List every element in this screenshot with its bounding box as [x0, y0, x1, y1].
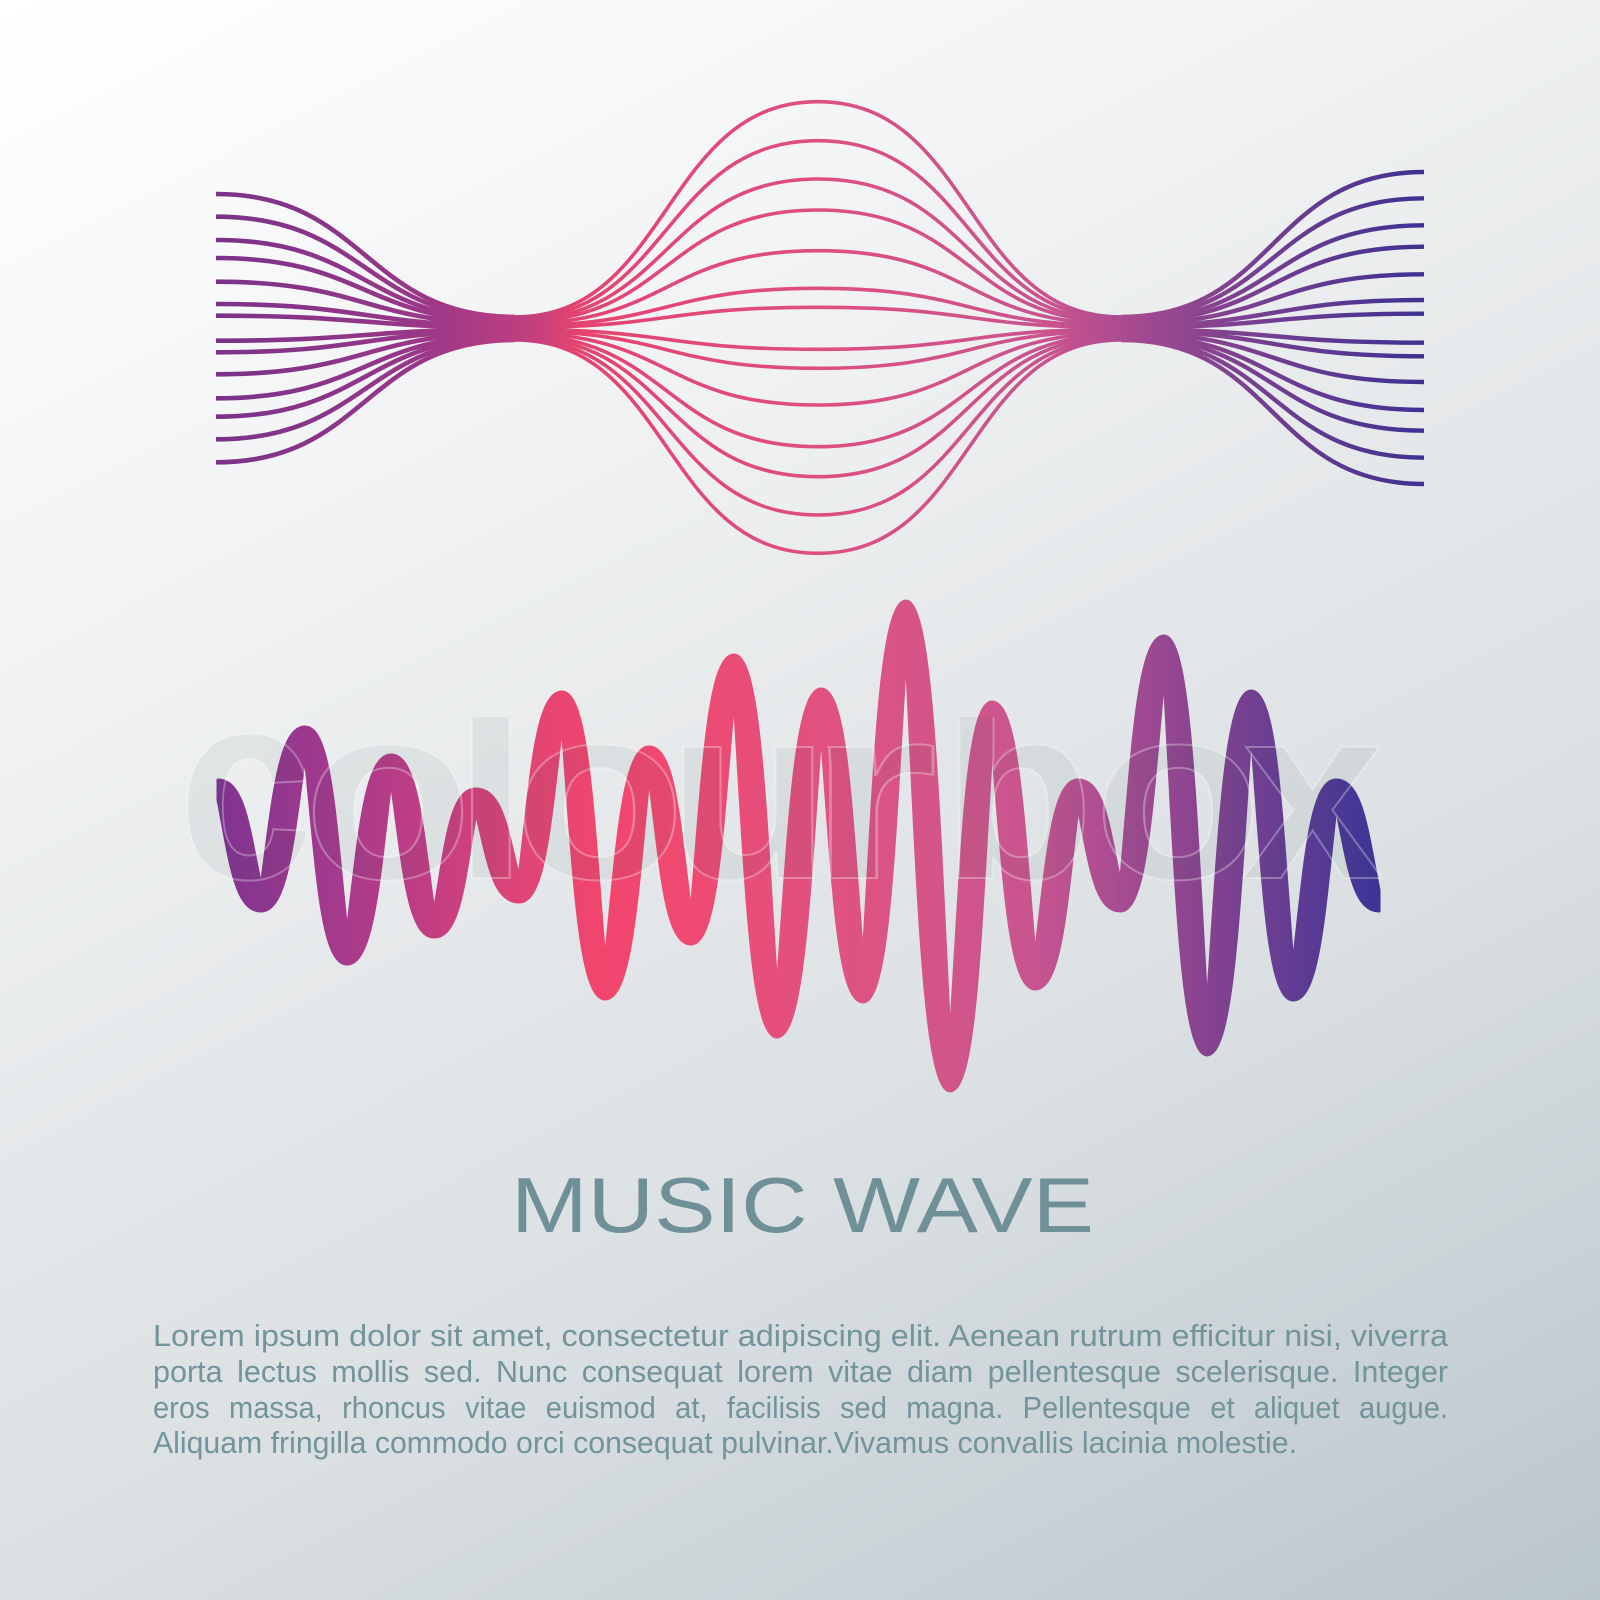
watermark: colourbox: c — [178, 635, 314, 935]
watermark: colourbox — [188, 717, 1384, 882]
title: MUSIC WAVE — [511, 1161, 1094, 1249]
watermark: colourbox: b — [942, 653, 1094, 931]
body text block — [153, 1318, 1449, 1460]
body text block: Lorem ipsum dolor sit amet, consectetur adipiscing elit. Aenean rutrum efficitur nisi, viverra — [153, 1318, 1449, 1353]
watermark: colourbox: o — [513, 653, 686, 931]
watermark: colourbox: l — [453, 653, 529, 931]
top wave: bundle of converging lines — [216, 102, 1424, 553]
body text block: porta lectus mollis sed. Nunc consequat lorem vitae diam pellentesque scelerisque. Integer — [153, 1354, 1448, 1389]
watermark: colourbox: o — [1093, 653, 1263, 931]
right fan of lines — [1121, 172, 1424, 484]
central bulge of lines — [515, 102, 1121, 553]
watermark: colourbox: o — [303, 653, 473, 931]
body text block: eros massa, rhoncus vitae euismod at, facilisis sed magna. Pellentesque et aliquet augue. — [153, 1390, 1448, 1425]
watermark: colourbox: r — [807, 653, 938, 931]
bottom wave: thick oscillating sound wave — [218, 601, 1379, 1091]
body text block: Aliquam fringilla commodo orci consequat pulvinar.Vivamus convallis lacinia molestie. — [153, 1425, 1297, 1460]
watermark: colourbox: u — [667, 653, 831, 931]
watermark: colourbox: x — [1242, 653, 1384, 931]
left fan of lines — [216, 194, 515, 462]
